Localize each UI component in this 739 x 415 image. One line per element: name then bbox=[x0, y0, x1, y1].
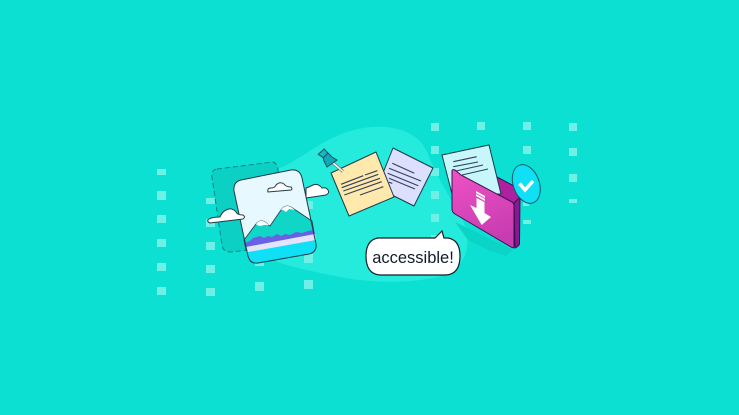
folder side bbox=[514, 197, 520, 248]
download arrow bbox=[470, 191, 491, 225]
speech bubble bbox=[366, 231, 460, 275]
photo card bbox=[234, 170, 316, 263]
cloud left bbox=[208, 209, 244, 223]
folder bbox=[452, 170, 520, 248]
folder shadow bbox=[455, 222, 513, 256]
decorative dots right bbox=[431, 122, 577, 241]
decorative dots left bbox=[157, 169, 313, 296]
purple ridge bbox=[246, 230, 315, 247]
push pin bbox=[318, 149, 343, 172]
yellow note bbox=[331, 152, 394, 216]
background blob bbox=[240, 127, 468, 282]
water bbox=[248, 240, 316, 263]
light stripe bbox=[246, 234, 316, 252]
card body bbox=[234, 170, 316, 263]
folder back bbox=[497, 177, 520, 207]
folder front bbox=[452, 170, 514, 248]
mountains bbox=[244, 206, 315, 250]
card outline bbox=[234, 170, 316, 263]
dashed backing card bbox=[212, 162, 290, 252]
check badge bbox=[507, 161, 545, 207]
mountain snow bbox=[256, 206, 295, 226]
bubble text: accessible! bbox=[372, 249, 454, 267]
small cloud in card bbox=[268, 183, 292, 192]
cloud behind right bbox=[306, 184, 329, 198]
folder document bbox=[442, 145, 501, 194]
lavender note bbox=[383, 148, 433, 206]
